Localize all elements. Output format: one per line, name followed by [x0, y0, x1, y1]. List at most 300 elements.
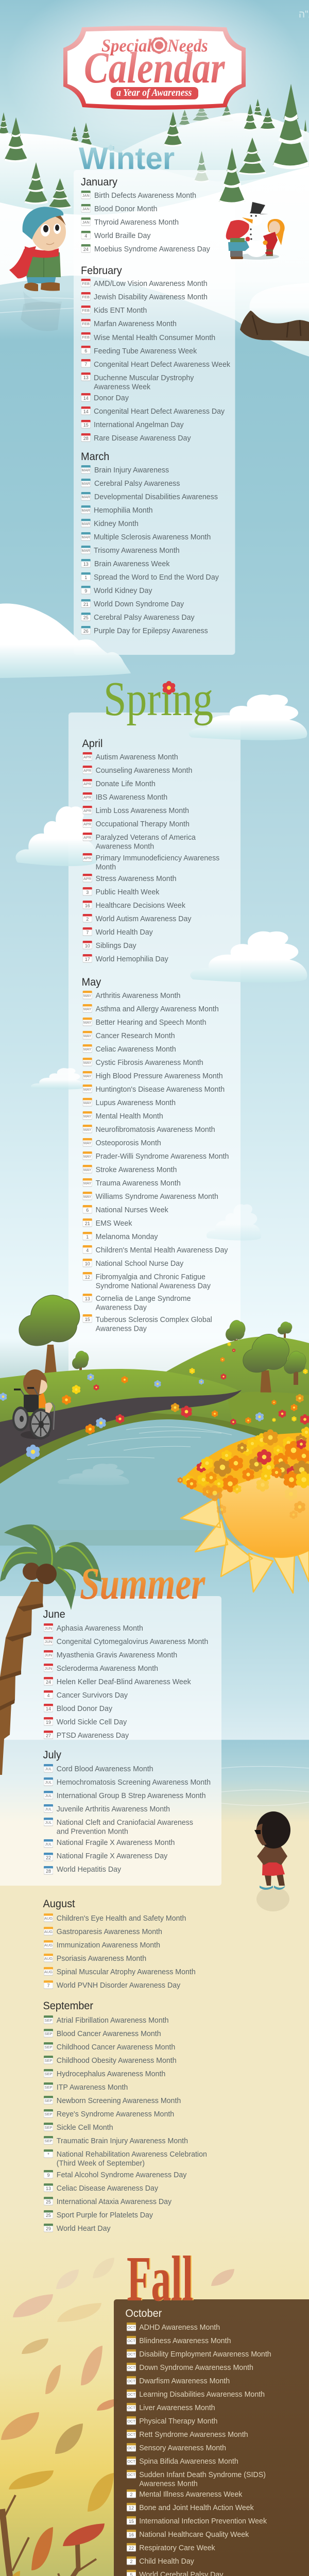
item: 17: [85, 957, 90, 962]
item: OCT: [127, 2419, 135, 2424]
item: 19: [46, 1720, 51, 1725]
item: JAN: [82, 207, 90, 211]
item: SEP: [44, 2018, 53, 2023]
item: 13: [83, 562, 89, 567]
item: SEP: [44, 2072, 53, 2076]
item: Lupus Awareness Month: [96, 1099, 176, 1107]
falling leaves: [1, 2258, 234, 2576]
item: 29: [46, 2226, 51, 2231]
item: MAY: [83, 1060, 92, 1065]
item: 7: [86, 930, 89, 935]
heading: June: June: [43, 1608, 65, 1620]
title: Needs: Needs: [167, 36, 208, 56]
item: 25: [46, 2213, 51, 2218]
item: Melanoma Monday: [96, 1233, 158, 1241]
item: 28: [83, 436, 89, 441]
item: Thyroid Awareness Month: [94, 218, 179, 227]
item: MAY: [83, 1194, 92, 1199]
item: Williams Syndrome Awareness Month: [96, 1193, 218, 1201]
large tree right trunk front: [260, 1376, 272, 1398]
item: AMD/Low Vision Awareness Month: [94, 280, 208, 288]
item: [127, 2470, 266, 2488]
item: PTSD Awareness Day: [57, 1732, 129, 1740]
item: SEP: [44, 2139, 53, 2143]
item: MAY: [83, 1167, 92, 1172]
item: Neurofibromatosis Awareness Month: [96, 1126, 215, 1134]
item: MAR: [81, 508, 91, 513]
item: Feeding Tube Awareness Week: [94, 347, 197, 355]
item: IBS Awareness Month: [96, 793, 167, 802]
item: [44, 1818, 193, 1836]
item: World Autism Awareness Day: [96, 915, 192, 923]
item: Child Health Day: [139, 2557, 195, 2566]
palm tree: [0, 1524, 101, 1775]
item: Primary Immunodeficiency Awareness: [96, 854, 219, 862]
icon: life ring: [151, 37, 167, 54]
item: MAR: [81, 521, 91, 526]
month: September: [43, 2000, 207, 2233]
item: Hydrocephalus Awareness Month: [57, 2070, 165, 2078]
item: Tuberous Sclerosis Complex Global: [96, 1316, 212, 1324]
flowers crown: [178, 1427, 309, 1519]
subtitle ribbon: a Year of Awareness: [116, 87, 192, 98]
item: 10: [85, 943, 90, 948]
item: Awareness Day: [96, 1325, 147, 1333]
item: Healthcare Decisions Week: [96, 902, 186, 910]
character: child in wheelchair: [12, 1369, 55, 1439]
item: Donate Life Month: [96, 780, 156, 788]
flowers on the hills: [0, 1342, 309, 1459]
item: MAY: [83, 1074, 92, 1078]
item: 1: [86, 1234, 89, 1240]
item: 2: [130, 2559, 133, 2564]
item: National Fragile X Awareness Month: [57, 1839, 175, 1847]
item: Purple Day for Epilepsy Awareness: [94, 627, 208, 635]
item: Cystic Fibrosis Awareness Month: [96, 1059, 203, 1067]
lake: [0, 1419, 309, 1546]
heading: Fall: Fall: [128, 2243, 194, 2315]
item: Moebius Syndrome Awareness Day: [94, 245, 211, 253]
item: OCT: [127, 2405, 135, 2410]
item: MAY: [83, 1127, 92, 1132]
heading: February: February: [81, 265, 123, 277]
pine tree in front of the winter panel: [219, 148, 245, 205]
item: JUN: [45, 1666, 52, 1671]
item: Aphasia Awareness Month: [57, 1624, 143, 1633]
item: and Prevention Month: [57, 1827, 128, 1836]
item: ADHD Awareness Month: [139, 2324, 220, 2332]
item: National Rehabilitation Awareness Celebration: [57, 2150, 207, 2159]
item: Helen Keller Deaf-Blind Awareness Week: [57, 1678, 191, 1686]
item: APR: [83, 822, 92, 826]
item: 4: [86, 1248, 89, 1253]
item: Learning Disabilities Awareness Month: [139, 2391, 265, 2399]
item: Blindness Awareness Month: [139, 2337, 231, 2345]
item: National Nurses Week: [96, 1206, 168, 1214]
item: 12: [129, 2505, 134, 2511]
item: OCT: [127, 2432, 135, 2437]
heading: July: July: [43, 1749, 62, 1761]
item: 15: [129, 2519, 134, 2524]
item: 7: [47, 1983, 50, 1988]
item: Osteoporosis Month: [96, 1139, 161, 1147]
character: boy in winter clothes: [9, 207, 66, 331]
item: Marfan Awareness Month: [94, 320, 177, 328]
item: Cancer Survivors Day: [57, 1691, 128, 1700]
item: 2: [86, 917, 89, 922]
item: World Hepatitis Day: [57, 1866, 122, 1874]
item: National Fragile X Awareness Day: [57, 1852, 168, 1860]
item: Sudden Infant Death Syndrome (SIDS): [139, 2471, 266, 2479]
item: Siblings Day: [96, 942, 136, 950]
small tree left: [72, 1351, 89, 1372]
panel: fall: [114, 2299, 309, 2576]
item: [83, 1314, 212, 1333]
item: 21: [85, 1221, 90, 1226]
item: Brain Awareness Week: [94, 560, 170, 568]
item: SEP: [44, 2058, 53, 2063]
item: Trisomy Awareness Month: [94, 547, 180, 555]
month: October: [125, 2308, 271, 2576]
item: MAY: [83, 1181, 92, 1185]
item: MAY: [83, 1100, 92, 1105]
item: MAY: [83, 1007, 92, 1011]
item: 3: [86, 890, 89, 895]
item: Brain Injury Awareness: [94, 466, 169, 474]
panel: spring: [68, 713, 241, 1382]
item: Dwarfism Awareness Month: [139, 2377, 230, 2385]
large tree right: [243, 1334, 289, 1398]
item: Reye's Syndrome Awareness Month: [57, 2110, 174, 2119]
item: JUL: [45, 1793, 52, 1798]
item: APR: [83, 856, 92, 860]
item: Cord Blood Awareness Month: [57, 1765, 153, 1773]
title: Calendar: Calendar: [84, 44, 226, 93]
heading: January: January: [81, 176, 118, 188]
item: JUL: [45, 1780, 52, 1785]
item: AUG: [44, 1956, 53, 1961]
item: OCT: [127, 2325, 135, 2330]
heading: Spring: Spring: [104, 672, 213, 725]
item: Rare Disease Awareness Day: [94, 434, 191, 443]
item: International Ataxia Awareness Day: [57, 2198, 172, 2206]
item: 14: [46, 1706, 51, 1711]
palm leaves: [4, 1524, 57, 1569]
item: JUL: [45, 1842, 52, 1846]
item: Syndrome National Awareness Day: [96, 1282, 211, 1291]
item: Respiratory Care Week: [139, 2544, 215, 2552]
month: April: [82, 738, 219, 963]
item: Children's Mental Health Awareness Day: [96, 1246, 228, 1255]
item: 10: [85, 1261, 90, 1266]
small tree far right: [278, 1321, 292, 1338]
item: FEB: [82, 335, 90, 340]
heading: April: April: [82, 738, 102, 750]
item: MAR: [81, 468, 91, 472]
item: MAY: [83, 1033, 92, 1038]
title: Special: Special: [101, 36, 152, 56]
item: OCT: [127, 2392, 135, 2397]
item: Celiac Disease Awareness Day: [57, 2184, 159, 2193]
item: Cancer Research Month: [96, 1032, 175, 1040]
item: Sickle Cell Month: [57, 2124, 113, 2132]
item: Juvenile Arthritis Awareness Month: [57, 1805, 170, 1814]
item: JUN: [45, 1653, 52, 1657]
item: MAY: [83, 1087, 92, 1092]
item: International Angelman Day: [94, 421, 184, 429]
item: SEP: [44, 2031, 53, 2036]
illustration: snowman with two children: [226, 202, 285, 260]
item: 6: [84, 348, 87, 353]
item: FEB: [82, 281, 90, 286]
sun with flowers: [178, 1427, 309, 1593]
item: JAN: [82, 220, 90, 225]
item: Awareness Day: [96, 1303, 147, 1312]
heading: Summer: Summer: [80, 1558, 205, 1609]
scene: fall landscape: [0, 2495, 173, 2576]
item: JUL: [45, 1820, 52, 1825]
item: 25: [46, 2199, 51, 2205]
item: Fetal Alcohol Syndrome Awareness Day: [57, 2171, 187, 2179]
item: Hemochromatosis Screening Awareness Month: [57, 1778, 211, 1787]
item: 9: [84, 588, 87, 594]
item: Mental Health Month: [96, 1112, 163, 1121]
item: Cornelia de Lange Syndrome: [96, 1295, 191, 1303]
item: Occupational Therapy Month: [96, 820, 190, 828]
item: JUN: [45, 1626, 52, 1631]
item: [83, 941, 136, 950]
item: Autism Awareness Month: [96, 753, 178, 761]
small tree on back hill: [226, 1320, 245, 1347]
item: Prader-Willi Syndrome Awareness Month: [96, 1153, 229, 1161]
item: 16: [129, 2532, 134, 2537]
item: Traumatic Brain Injury Awareness Month: [57, 2137, 188, 2145]
icon: red flower: [163, 681, 175, 694]
item: Scleroderma Awareness Month: [57, 1665, 158, 1673]
item: Jewish Disability Awareness Month: [94, 293, 208, 301]
item: Awareness Week: [94, 383, 151, 392]
item: World Heart Day: [57, 2225, 111, 2233]
scene: winter back: [0, 0, 309, 357]
item: World Down Syndrome Day: [94, 600, 184, 608]
panel: winter: [74, 170, 235, 655]
right foreground hill: [237, 1392, 309, 1448]
item: MAY: [83, 1114, 92, 1118]
item: Rett Syndrome Awareness Month: [139, 2431, 248, 2439]
heading: May: May: [81, 976, 101, 988]
item: 12: [85, 1275, 90, 1280]
item: MAY: [83, 993, 92, 998]
month: May: [81, 976, 229, 1333]
item: MAY: [83, 1047, 92, 1052]
item: 13: [85, 1296, 90, 1301]
big tree left: [19, 1295, 80, 1378]
item: Trauma Awareness Month: [96, 1179, 181, 1188]
item: 28: [46, 1869, 51, 1874]
item: 16: [85, 903, 90, 908]
item: Fibromyalgia and Chronic Fatigue: [96, 1273, 205, 1281]
heading: Fall: Fall: [127, 2243, 193, 2315]
item: Kids ENT Month: [94, 307, 147, 315]
item: National School Nurse Day: [96, 1260, 184, 1268]
month: February: [81, 265, 231, 443]
item: Duchenne Muscular Dystrophy: [94, 374, 194, 382]
item: Liver Awareness Month: [139, 2404, 215, 2412]
character: boy on the beach: [254, 1811, 290, 1911]
item: JUN: [45, 1639, 52, 1644]
item: OCT: [127, 2352, 135, 2357]
item: Bone and Joint Health Action Week: [139, 2504, 254, 2512]
item: Childhood Obesity Awareness Month: [57, 2057, 177, 2065]
item: Cerebral Palsy Awareness: [94, 480, 180, 488]
item: OCT: [127, 2446, 135, 2450]
item: Birth Defects Awareness Month: [94, 192, 196, 200]
item: Spread the Word to End the Word Day: [94, 573, 219, 582]
item: [83, 1272, 211, 1291]
sun rays: [181, 1498, 309, 1593]
item: 4: [47, 1693, 50, 1698]
item: Arthritis Awareness Month: [96, 992, 180, 1000]
lake bank: [0, 1411, 309, 1484]
item: AUG: [44, 1970, 53, 1974]
item: Blood Cancer Awareness Month: [57, 2030, 161, 2038]
item: High Blood Pressure Awareness Month: [96, 1072, 223, 1080]
item: 24: [83, 247, 89, 252]
item: 25: [83, 615, 89, 620]
month: July: [43, 1749, 211, 1874]
item: Kidney Month: [94, 520, 139, 528]
item: OCT: [127, 2338, 135, 2343]
item: 21: [83, 602, 89, 607]
item: Stress Awareness Month: [96, 875, 177, 883]
item: MAY: [83, 1154, 92, 1159]
item: Spina Bifida Awareness Month: [139, 2458, 238, 2466]
item: Mental Illness Awareness Week: [139, 2490, 243, 2499]
item: National Cleft and Craniofacial Awareness: [57, 1819, 193, 1827]
item: FEB: [82, 308, 90, 313]
palm trunk: [0, 1582, 43, 1775]
snowy island: [240, 283, 309, 341]
item: Asthma and Allergy Awareness Month: [96, 1005, 219, 1013]
title frame: [63, 26, 246, 110]
item: APR: [83, 755, 92, 759]
item: World Hemophilia Day: [96, 955, 168, 963]
item: SEP: [44, 2112, 53, 2116]
item: APR: [83, 876, 92, 881]
item: 15: [83, 422, 89, 428]
item: Multiple Sclerosis Awareness Month: [94, 533, 211, 541]
item: World Braille Day: [94, 232, 151, 240]
item: 22: [129, 2546, 134, 2551]
tree behind: [284, 1351, 306, 1385]
item: 6: [86, 1208, 89, 1213]
heading: October: October: [125, 2308, 162, 2319]
item: 22: [46, 1855, 51, 1860]
item: Disability Employment Awareness Month: [139, 2350, 271, 2359]
item: International Infection Prevention Week: [139, 2517, 267, 2526]
item: Hemophilia Month: [94, 506, 153, 515]
item: Huntington's Disease Awareness Month: [96, 1086, 225, 1094]
item: (Third Week of September): [57, 2159, 145, 2168]
section: winter lists: [81, 176, 211, 253]
heading: September: September: [43, 2000, 93, 2012]
item: Immunization Awareness Month: [57, 1941, 160, 1950]
item: Psoriasis Awareness Month: [57, 1955, 146, 1963]
item: FEB: [82, 295, 90, 299]
item: Newborn Screening Awareness Month: [57, 2097, 181, 2105]
item: Blood Donor Month: [94, 205, 157, 213]
item: 13: [83, 375, 89, 380]
item: Awareness Month: [96, 842, 154, 851]
item: Childhood Cancer Awareness Month: [57, 2043, 175, 2052]
item: MAY: [83, 1020, 92, 1025]
item: [81, 393, 129, 402]
item: Stroke Awareness Month: [96, 1166, 177, 1174]
item: Wise Mental Health Consumer Month: [94, 334, 215, 342]
item: 27: [46, 1733, 51, 1738]
foreground right meadow: [227, 1393, 309, 1443]
item: 14: [83, 396, 89, 401]
item: SEP: [44, 2098, 53, 2103]
item: Celiac Awareness Month: [96, 1045, 176, 1054]
item: Atrial Fibrillation Awareness Month: [57, 2016, 169, 2025]
item: Counseling Awareness Month: [96, 767, 192, 775]
item: MAR: [81, 481, 91, 486]
item: Paralyzed Veterans of America: [96, 834, 196, 842]
item: International Group B Strep Awareness Month: [57, 1792, 206, 1800]
item: Down Syndrome Awareness Month: [139, 2364, 253, 2372]
item: World Health Day: [96, 928, 153, 937]
item: 15: [85, 1317, 90, 1322]
item: Myasthenia Gravis Awareness Month: [57, 1651, 177, 1659]
panel: summer: [0, 1596, 221, 1886]
cloud reflection: [58, 1464, 129, 1485]
item: OCT: [127, 2472, 135, 2477]
item: APR: [83, 782, 92, 786]
item: Blood Donor Day: [57, 1705, 113, 1713]
item: [83, 1294, 191, 1312]
heading: August: August: [43, 1898, 75, 1910]
item: [83, 833, 196, 851]
item: OCT: [127, 2459, 135, 2464]
month: March: [81, 451, 219, 635]
back hill: [166, 1336, 309, 1443]
item: *: [47, 2152, 49, 2157]
item: SEP: [44, 2125, 53, 2130]
item: Children's Eye Health and Safety Month: [57, 1914, 186, 1923]
item: OCT: [127, 2379, 135, 2383]
item: [81, 372, 194, 392]
month: June: [43, 1608, 208, 1740]
item: AUG: [44, 1929, 53, 1934]
item: JUL: [45, 1807, 52, 1811]
item: 24: [46, 1680, 51, 1685]
item: SEP: [44, 2085, 53, 2090]
item: OCT: [127, 2365, 135, 2370]
item: MAR: [81, 548, 91, 553]
item: 4: [84, 233, 87, 239]
item: SEP: [44, 2045, 53, 2049]
item: Month: [96, 863, 116, 872]
item: Spinal Muscular Atrophy Awareness Month: [57, 1968, 196, 1976]
item: 13: [46, 2186, 51, 2191]
item: EMS Week: [96, 1219, 132, 1228]
item: Donor Day: [94, 394, 129, 402]
scene: spring landscape: [0, 1295, 309, 1546]
item: JAN: [82, 193, 90, 198]
item: Gastroparesis Awareness Month: [57, 1928, 162, 1936]
item: MAR: [81, 495, 91, 499]
